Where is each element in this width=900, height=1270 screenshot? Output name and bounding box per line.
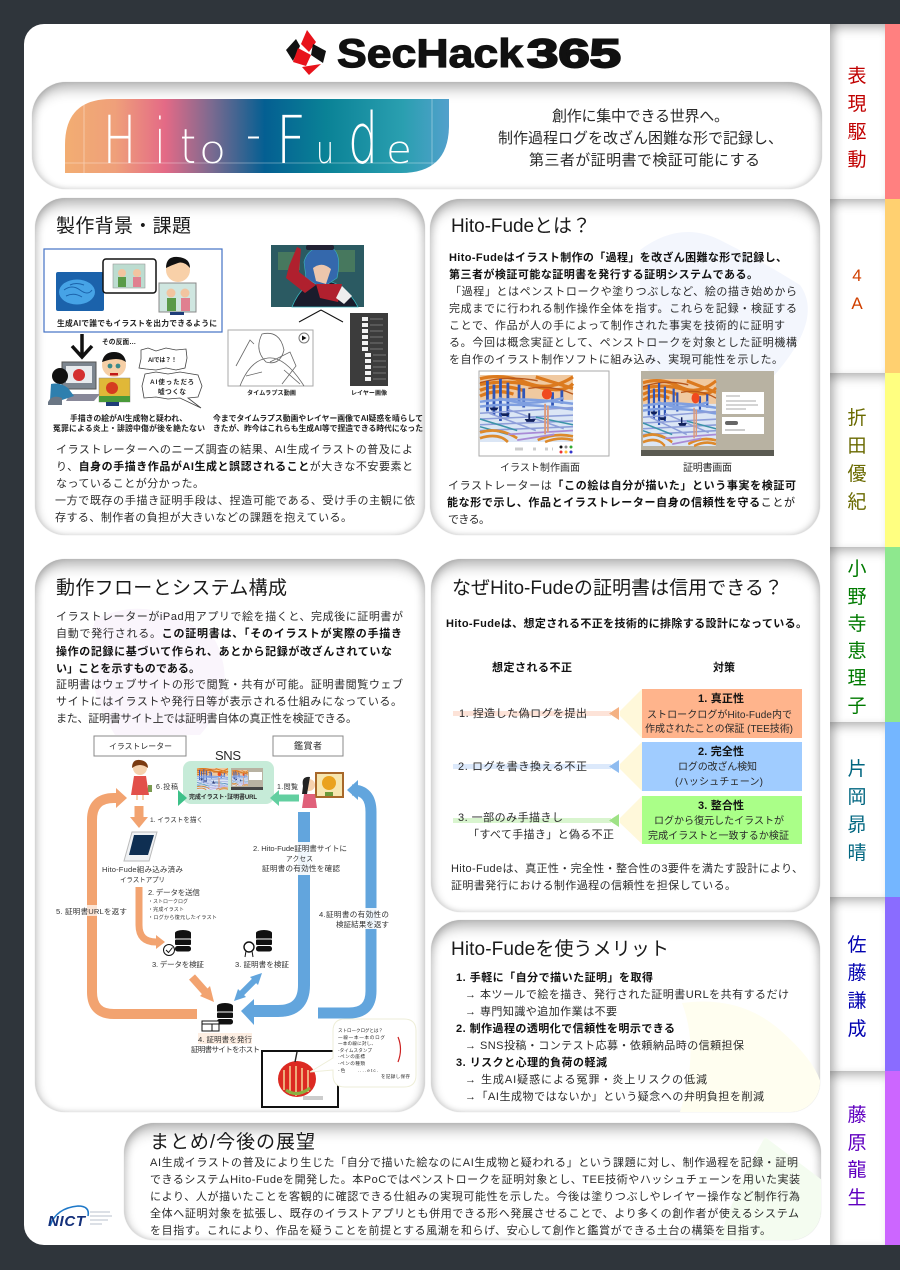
heading: Hito-Fudeとは？ — [451, 216, 591, 237]
body text: 操作の記録に基づいて作られ、あとから記録が改ざんされていな — [56, 644, 392, 658]
sidebar: member 3: 岡 — [847, 787, 867, 808]
body text: イラストレーターがiPad用アプリで絵を描くと、完成後に証明書が — [56, 609, 403, 623]
body text: 存する、制作者の負担が大きいなどの課題を抱えている。 — [55, 510, 352, 524]
caption: evidence no longer reliable — [213, 413, 423, 433]
sidebar: member 1: 田 — [847, 436, 867, 457]
label: send data: ・ストロークログ — [148, 898, 188, 905]
tagline — [498, 108, 783, 169]
illustration: apple on tablet — [262, 1051, 338, 1107]
sidebar: member 4 — [830, 897, 900, 1071]
illustration: character artwork — [271, 245, 364, 307]
arrow: but on the other hand — [72, 334, 92, 357]
callout: AI? — [139, 348, 187, 370]
row 3: partial drawing and consistency: 3. 一部のみ手描きし — [458, 810, 563, 824]
lead sentence: Hito-Fudeは、想定される不正を技術的に排除する設計になっている。 — [446, 616, 807, 630]
tagline: 創作に集中できる世界へ。 — [552, 108, 729, 125]
body text — [150, 1155, 800, 1237]
body text: 完成までに行われる制作操作全体を指す。これらを記録・検証する — [449, 301, 797, 315]
body text — [449, 250, 797, 366]
closing text: 能な形で示し、作品とイラストレーター自身の信頼性を守ることが — [447, 495, 795, 509]
body text: 全体へ証明対象を拡張し、既存のイラストアプリとも併用できる形へ発展させることで、より多くの創作者が使えるシステム — [150, 1206, 799, 1220]
body text: 第三者が検証可能な証明書を発行する証明システムである。 — [449, 267, 758, 281]
caption: evidence no longer reliable: きたが、昨今はこれらも生成AI等で捏造できる時代になった — [213, 423, 423, 433]
label: issue certificate: 4. 証明書を発行 — [198, 1034, 252, 1044]
heading: 製作背景・課題 — [56, 215, 191, 237]
label: issue certificate — [191, 1033, 260, 1054]
blue access arrow — [241, 812, 304, 1025]
sidebar: team number: A — [851, 294, 863, 313]
body text: また、証明書サイト上では証明書自体の真正性を検証できる。 — [56, 711, 357, 725]
banner: Hito-Fude logo: F — [276, 102, 306, 179]
merit list: 3. リスクと心理的負荷の軽減 — [456, 1055, 607, 1069]
body text: ことで、作品が人の手によって制作された事実を技術的に証明す — [449, 318, 785, 332]
banner: Hito-Fude logo — [65, 98, 449, 180]
body text: サイトにはイラストや発行日等が表示される仕組みになっている。 — [56, 694, 402, 708]
label: send data: 2. データを送信 — [148, 887, 200, 897]
label: return URL: 5. 証明書URLを返す — [56, 906, 127, 916]
body text: AI生成イラストの普及により生じた「自分で描いた絵なのにAI生成物と疑われる」という課題に対し、制作過程を記録・証明 — [150, 1155, 798, 1169]
callout: used AI: 嘘つくな — [158, 387, 186, 396]
caption: drawing app: イラスト制作画面 — [500, 461, 580, 474]
panel: summary and future outlook — [124, 1123, 821, 1240]
body text: り、自身の手描き作品がAI生成と誤認されることが大きな不安要素と — [56, 459, 413, 473]
sidebar: member 4: 謙 — [847, 990, 867, 1012]
row 1: forged log and authenticity: 1. 捏造した偽ログを提出 — [459, 706, 587, 720]
illustration: layers — [350, 313, 388, 386]
decorative tint blob — [90, 609, 225, 735]
box: viewer: 鑑賞者 — [294, 740, 322, 751]
double arrow: certificate verify — [234, 973, 262, 1001]
sidebar: member 2: 小 — [847, 558, 867, 580]
icon: database verify data — [164, 930, 191, 956]
sidebar: member 2: 寺 — [847, 613, 867, 635]
arrow: draw — [130, 806, 148, 828]
body text: イラストレーターへのニーズ調査の結果、AI生成イラストの普及によ — [56, 442, 413, 456]
banner: Hito-Fude logo: H — [103, 102, 136, 179]
callout: what is stroke log: -タイムスタンプ — [338, 1047, 372, 1054]
callout: used AI — [142, 372, 202, 408]
sidebar: team number: 4 — [852, 266, 862, 285]
body text: 一方で既存の手描き証明手段は、捏造可能である、受け手の主観に依 — [55, 493, 415, 507]
heading: Hito-Fudeを使うメリット — [451, 938, 669, 960]
sidebar: member 4: 佐 — [847, 934, 867, 956]
label: verify data: 3. データを検証 — [152, 959, 204, 969]
sidebar: member 1: 折 — [847, 407, 867, 429]
sidebar: member 5: 原 — [847, 1133, 867, 1154]
sidebar: member 1 — [830, 373, 900, 547]
label: send data — [148, 887, 217, 921]
icon: database verify certificate — [244, 930, 272, 957]
caption: accused artwork: 手描きの絵がAI生成物と疑われ、 — [70, 413, 187, 423]
heading: 動作フローとシステム構成 — [56, 577, 287, 599]
box: viewer — [273, 736, 343, 756]
caption: accused artwork — [53, 413, 205, 433]
body text: い」ことを示すものである。 — [56, 662, 200, 675]
icon: tablet — [124, 832, 157, 861]
big orange return arrow — [92, 788, 197, 1014]
label: send data: ・完成イラスト — [148, 906, 184, 913]
label: draw: 1. イラストを描く — [150, 815, 203, 824]
body text: 「過程」とはペンストロークや塗りつぶしなど、絵の描き始めから — [450, 284, 797, 298]
label: access site: 証明書の有効性を確認 — [262, 863, 340, 873]
box: illustrator: イラストレーター — [109, 742, 172, 751]
decorative tint blob — [680, 1002, 822, 1112]
diagram: system flow — [56, 736, 416, 1107]
panel: production background and issues — [35, 198, 425, 535]
sidebar: member 4: 藤 — [847, 962, 867, 984]
merit list: → 本ツールで絵を描き、発行された証明書URLを共有するだけ — [465, 987, 789, 1001]
closing text — [447, 478, 796, 526]
sidebar: member 3: 晴 — [847, 842, 867, 864]
row 3: partial drawing and consistency — [453, 796, 802, 844]
row 3: partial drawing and consistency: ログから復元したイラストが — [654, 814, 784, 827]
banner: Hito-Fude logo: d — [348, 98, 378, 180]
illustration: generative AI box — [44, 249, 222, 332]
tagline: 第三者が証明書で検証可能にする — [529, 152, 760, 169]
sidebar: member 3 — [830, 722, 900, 897]
sidebar: team name — [830, 24, 900, 199]
label: return result: 4.証明書の有効性の — [319, 909, 389, 919]
body text: 証明書はウェブサイトの形で閲覧・共有が可能。証明書閲覧ウェブ — [56, 677, 403, 691]
arrow: send data — [139, 887, 165, 949]
callout: what is stroke log: 一本の線に対し、 — [338, 1040, 376, 1047]
callout: AI?: AIでは？！ — [148, 357, 177, 364]
sidebar: team name: 駆 — [847, 122, 867, 143]
illustration: generative AI box: 生成AIで誰でもイラストを出力できるように — [57, 318, 217, 328]
SNS box: 完成イラスト･証明書URL — [189, 793, 257, 801]
closing text: 証明書発行における制作過程の信頼性を担保している。 — [451, 878, 736, 892]
row 2: rewritten log and integrity: 2. 完全性 — [698, 744, 744, 758]
merit list: → 専門知識や追加作業は不要 — [465, 1004, 617, 1018]
label: app — [102, 864, 183, 884]
sidebar: member 2: 野 — [847, 587, 867, 608]
panel: merits of using Hito-Fude — [431, 920, 820, 1112]
row 1: forged log and authenticity: ストロークログがHito-Fude内で — [647, 708, 792, 721]
caption: certificate: 証明書画面 — [683, 461, 732, 474]
sidebar: member 5 — [830, 1071, 900, 1245]
label: on the other hand: その反面… — [102, 338, 136, 346]
closing text: イラストレーターは「この絵は自分が描いた」という事実を検証可 — [448, 478, 796, 492]
sidebar: member 1: 紀 — [847, 491, 867, 513]
sidebar: team name: 動 — [847, 149, 867, 171]
SNS box — [183, 748, 274, 804]
row 3: partial drawing and consistency: 「すべて手描き」と偽る不正 — [468, 827, 614, 841]
heading: なぜHito-Fudeの証明書は信用できる？ — [452, 577, 783, 599]
row 1: forged log and authenticity: 1. 真正性 — [698, 691, 744, 705]
label: browse: 1.閲覧 — [277, 782, 298, 791]
row 2: rewritten log and integrity: ログの改ざん検知 — [678, 760, 757, 773]
arrows: branch to evidence — [299, 310, 343, 322]
merit list: 2. 制作過程の透明化で信頼性を明示できる — [456, 1021, 675, 1035]
sidebar: member 2 — [830, 547, 900, 722]
merit list — [456, 970, 789, 1103]
body text: Hito-Fudeはイラスト制作の「過程」を改ざん困難な形で記録し、 — [449, 250, 787, 264]
sidebar: member 4: 成 — [847, 1018, 867, 1040]
callout: what is stroke log: 一線一本一本のログ — [338, 1034, 385, 1041]
panel: operation flow and system architecture — [35, 559, 425, 1112]
illustration: illustrator accused — [48, 352, 130, 406]
banner: Hito-Fude logo: o — [199, 128, 226, 172]
body text: 自動で発行される。この証明書は、「そのイラストが実際の手描き — [56, 626, 402, 640]
label: post: 6.投稿 — [156, 782, 178, 791]
label: timelapse: タイムラプス動画 — [247, 389, 296, 397]
closing text: できる。 — [448, 513, 490, 526]
person: illustrator — [131, 760, 152, 800]
callout: what is stroke log — [310, 1019, 416, 1087]
tagline: 制作過程ログを改ざん困難な形で記録し、 — [498, 129, 783, 147]
label: access site: アクセス — [286, 855, 313, 863]
merit list: 1. 手軽に「自分で描いた証明」を取得 — [456, 970, 653, 984]
body text: を目指す。これにより、作品を疑うことを前提とする風潮を和らげ、安心して創作と鑑賞ができる土台の構築を目指す。 — [150, 1223, 771, 1237]
row 1: forged log and authenticity — [453, 689, 802, 738]
callout: used AI: AI使っただろ — [150, 377, 194, 386]
callout: what is stroke log: -ペンの座標 — [338, 1053, 365, 1060]
merit list: → SNS投稿・コンテスト応募・依頼納品時の信頼担保 — [465, 1038, 744, 1052]
label: send data: ・ログから復元したイラスト — [148, 913, 217, 921]
screenshot: drawing app — [479, 371, 609, 456]
callout: what is stroke log: を記録し保存 — [381, 1073, 410, 1080]
body text: を自作のイラスト制作ソフトに組み込み、実現可能性を示した。 — [449, 352, 783, 366]
sidebar: member 5: 藤 — [847, 1104, 867, 1126]
illustration: timelapse video — [228, 330, 313, 386]
sidebar: team name: 表 — [847, 65, 867, 87]
logo number: 365 — [527, 32, 621, 76]
closing text — [451, 861, 803, 892]
sidebar: member 5: 生 — [847, 1187, 867, 1209]
label: return result — [319, 908, 389, 929]
arrow: browse — [270, 790, 299, 806]
row 2: rewritten log and integrity: 2. ログを書き換える不正 — [458, 759, 587, 773]
row 2: rewritten log and integrity: (ハッシュチェーン) — [675, 776, 763, 788]
arrow: data to issuing — [192, 977, 214, 1002]
sidebar: member 2: 子 — [847, 696, 867, 717]
banner: Hito-Fude logo: t — [180, 119, 196, 175]
column header: threats: 想定される不正 — [492, 660, 572, 674]
row 2: rewritten log and integrity — [453, 742, 802, 791]
sidebar: team number — [830, 199, 900, 373]
row 3: partial drawing and consistency: 完成イラストと一致するか検証 — [648, 829, 789, 842]
screenshot: certificate — [641, 371, 774, 456]
body text: る。今回は概念実証として、ペンストロークを対象とした証明機構 — [449, 335, 797, 349]
caption: accused artwork: 冤罪による炎上・誹謗中傷が後を絶たない — [53, 423, 205, 433]
closing text: Hito-Fudeは、真正性・完全性・整合性の3要件を満たす設計により、 — [451, 861, 803, 875]
banner: Hito-Fude logo: u — [316, 128, 334, 172]
sidebar: member 5: 龍 — [847, 1159, 867, 1181]
caption: evidence no longer reliable: 今までタイムラプス動画やレイヤー画像でAI疑惑を晴らして — [213, 413, 423, 423]
body text: できるシステムHito-Fudeを開発した。本PoCではペンストロークを証明対象とし、TEE技術やハッシュチェーンを用いた実装 — [150, 1172, 800, 1186]
logo wordmark: SecHack — [337, 32, 524, 76]
decorative tint blob — [640, 232, 808, 431]
label: app: Hito-Fude組み込み済み — [102, 864, 183, 874]
column header: countermeasures: 対策 — [713, 660, 735, 674]
SNS box: SNS — [215, 748, 241, 763]
banner: Hito-Fude logo: - — [246, 105, 261, 163]
banner: Hito-Fude logo: i — [155, 105, 165, 178]
label: verify certificate: 3. 証明書を検証 — [235, 959, 289, 969]
sidebar: member 2: 恵 — [847, 640, 867, 662]
sidebar: member 3: 昴 — [847, 815, 867, 836]
logo: SecHack365 — [286, 30, 621, 76]
sidebar: team name: 現 — [847, 94, 867, 115]
label: access site: 2. Hito-Fude証明書サイトに — [253, 843, 347, 853]
logo: NICT: NICT — [48, 1213, 87, 1230]
panel: hero banner and tagline — [32, 82, 822, 189]
panel: why the certificate can be trusted — [431, 559, 820, 912]
sidebar: member 2: 理 — [847, 668, 867, 689]
panel: what is Hito-Fude — [430, 199, 820, 535]
logo: NICT — [48, 1205, 112, 1230]
row 3: partial drawing and consistency: 3. 整合性 — [698, 798, 744, 812]
sidebar: member 3: 片 — [847, 758, 867, 780]
label: return result: 検証結果を返す — [336, 919, 389, 929]
merit list: →「AI生成物ではないか」という疑念への弁明負担を削減 — [465, 1089, 764, 1103]
box: illustrator — [94, 736, 186, 756]
label: issue certificate: 証明書サイトをホスト — [191, 1044, 260, 1054]
body text — [55, 442, 415, 524]
person: viewer with painting — [302, 773, 343, 808]
row 1: forged log and authenticity: 作成されたことの保証 (TEE技術) — [645, 722, 793, 735]
body text — [56, 609, 403, 725]
icon: database issue — [202, 1003, 233, 1031]
label: access site — [253, 842, 347, 875]
label: layers: レイヤー画像 — [351, 389, 387, 397]
sidebar: member 1: 優 — [847, 463, 867, 485]
arrow: post to SNS — [153, 790, 187, 806]
callout: what is stroke log: ストロークログとは？ — [338, 1027, 383, 1034]
callout: what is stroke log: -色 ....etc. — [338, 1067, 378, 1073]
body text: により、人が描いたことを客観的に確認できる仕組みの実現可能性を示した。今後は塗りつぶしやレイヤー操作など制作行為 — [150, 1189, 800, 1203]
body text: なっていることが分かった。 — [56, 476, 204, 490]
callout: what is stroke log: -ペンの種類 — [338, 1060, 365, 1067]
merit list: → 生成AI疑惑による冤罪・炎上リスクの低減 — [465, 1072, 707, 1086]
label: app: イラストアプリ — [120, 876, 165, 884]
decorative tint blob — [719, 1137, 822, 1240]
blue result arrow — [318, 780, 371, 1013]
icon: red and black shards — [286, 30, 326, 75]
heading: まとめ/今後の展望 — [150, 1131, 315, 1153]
banner: Hito-Fude logo: e — [386, 128, 412, 172]
